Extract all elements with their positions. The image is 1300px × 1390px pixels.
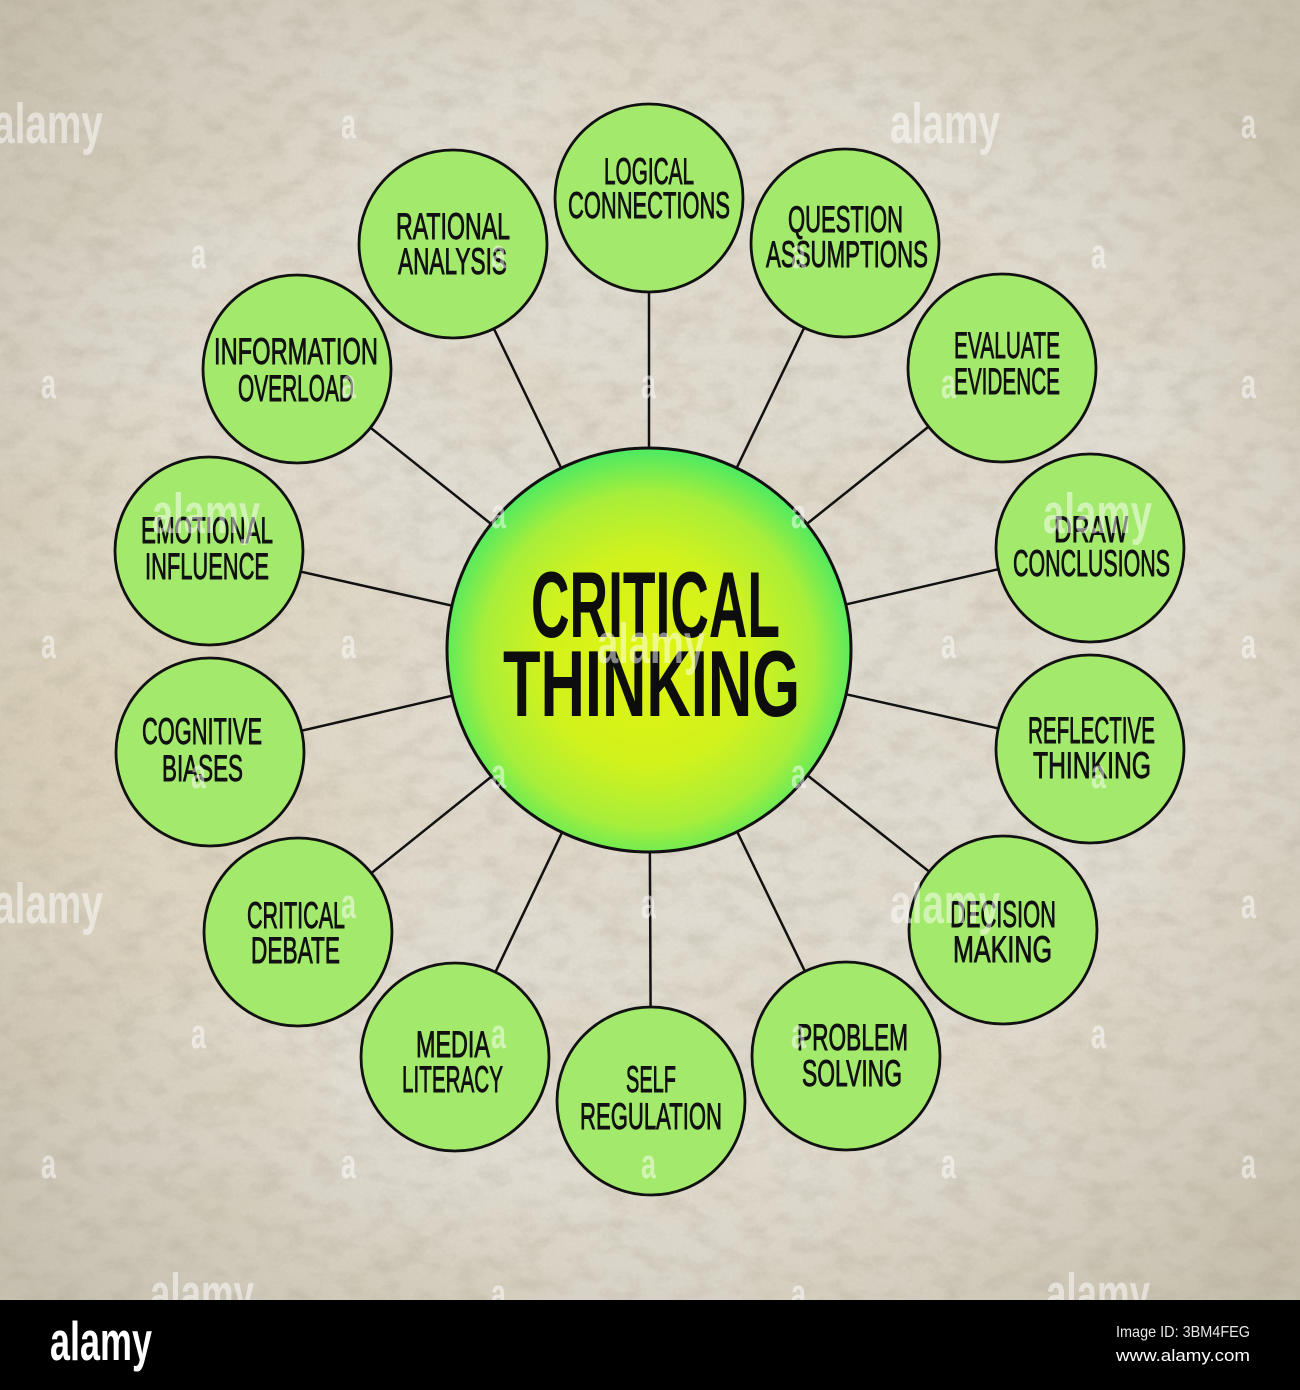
topic: self regulation: SELF [626,1059,676,1100]
watermark overlay: a [41,620,56,667]
watermark overlay: a [491,750,506,797]
watermark overlay: a [491,230,506,277]
watermark overlay: alamy [1046,1262,1150,1326]
watermark overlay: a [791,1270,806,1317]
footer bar [0,1300,1300,1390]
watermark overlay: alamy [597,612,705,676]
topic: information overload [203,275,391,463]
title: CRITICAL [531,552,780,657]
title [503,552,800,736]
topic: question assumptions: QUESTION [788,199,903,240]
topic: evaluate evidence: EVIDENCE [954,361,1060,402]
watermark overlay: a [491,1010,506,1057]
watermark overlay: a [191,750,206,797]
topic: problem solving [752,962,940,1150]
topic: question assumptions: ASSUMPTIONS [766,234,928,275]
topic: logical connections: LOGICAL [604,151,694,192]
watermark overlay: a [791,1010,806,1057]
watermark overlay: a [791,230,806,277]
topic: decision making [909,836,1097,1024]
image id: Image ID: 3BM4FEG [1116,1324,1250,1341]
topic: question assumptions [751,149,939,337]
topic: self regulation [557,1007,745,1195]
topic: critical debate [204,838,392,1026]
topic: emotional influence [115,457,303,645]
central hub: critical thinking [447,448,851,852]
topic: logical connections: CONNECTIONS [568,185,730,226]
topic: cognitive biases: BIASES [162,748,243,789]
topic: media literacy: MEDIA [416,1024,490,1065]
title: THINKING [503,631,800,736]
watermark overlay: a [641,360,656,407]
topic: cognitive biases [116,658,304,846]
watermark overlay: a [341,880,356,927]
watermark overlay: a [641,880,656,927]
watermark overlay: alamy [152,482,260,546]
watermark overlay: a [1091,230,1106,277]
topic: logical connections [555,104,743,292]
topic: self regulation: REGULATION [580,1096,722,1137]
footer logo: alamy [50,1310,152,1372]
topic: media literacy [361,963,549,1151]
topic: emotional influence: EMOTIONAL [141,510,273,551]
watermark overlay: a [191,230,206,277]
watermark overlay: a [341,100,356,147]
watermark overlay: a [41,360,56,407]
topic: rational analysis [359,150,547,338]
topic: critical debate: CRITICAL [247,895,345,936]
watermark overlay: a [1241,880,1256,927]
watermark overlay: a [791,490,806,537]
watermark overlay: a [341,1140,356,1187]
watermark overlay: a [341,360,356,407]
spokes connecting hub to topics [209,198,1090,1101]
watermark overlay: a [941,1140,956,1187]
topic: decision making: MAKING [953,929,1052,970]
watermark overlay: alamy [150,1262,254,1326]
topic: cognitive biases: COGNITIVE [142,711,262,752]
topic: critical debate: DEBATE [251,930,340,971]
topic: draw conclusions: CONCLUSIONS [1013,543,1170,584]
topic: information overload: INFORMATION [214,331,378,372]
watermark overlay: a [791,750,806,797]
watermark overlay: a [491,490,506,537]
topic: decision making: DECISION [950,894,1056,935]
topic: rational analysis: RATIONAL [396,206,510,247]
topic: rational analysis: ANALYSIS [398,241,507,282]
watermark overlay: a [341,620,356,667]
watermark overlay: alamy [1043,482,1152,546]
watermark overlay: a [1091,750,1106,797]
website: www.alamy.com [1115,1346,1250,1365]
watermark overlay: a [1091,1010,1106,1057]
topic: evaluate evidence [908,274,1096,462]
watermark overlay: a [941,620,956,667]
topic: media literacy: LITERACY [402,1059,503,1100]
topic: reflective thinking [996,655,1184,843]
topic: reflective thinking: REFLECTIVE [1028,710,1155,751]
watermark overlay: alamy [890,872,1000,936]
watermark overlay: a [1241,620,1256,667]
topic: evaluate evidence: EVALUATE [954,325,1060,366]
watermark overlay: alamy [890,92,1000,156]
watermark overlay: a [941,360,956,407]
watermark overlay: a [491,1270,506,1317]
topic: information overload: OVERLOAD [238,368,354,409]
topic: problem solving: PROBLEM [797,1017,908,1058]
topic: draw conclusions: DRAW [1054,509,1128,550]
watermark overlay: a [1241,1140,1256,1187]
watermark overlay: a [641,1140,656,1187]
topic: problem solving: SOLVING [802,1053,902,1094]
topic: draw conclusions [996,454,1184,642]
watermark overlay: a [1241,360,1256,407]
watermark overlay: a [191,1010,206,1057]
watermark overlay: a [41,1140,56,1187]
topic: emotional influence: INFLUENCE [145,546,269,587]
topic: reflective thinking: THINKING [1033,745,1151,786]
watermark overlay: a [1241,100,1256,147]
